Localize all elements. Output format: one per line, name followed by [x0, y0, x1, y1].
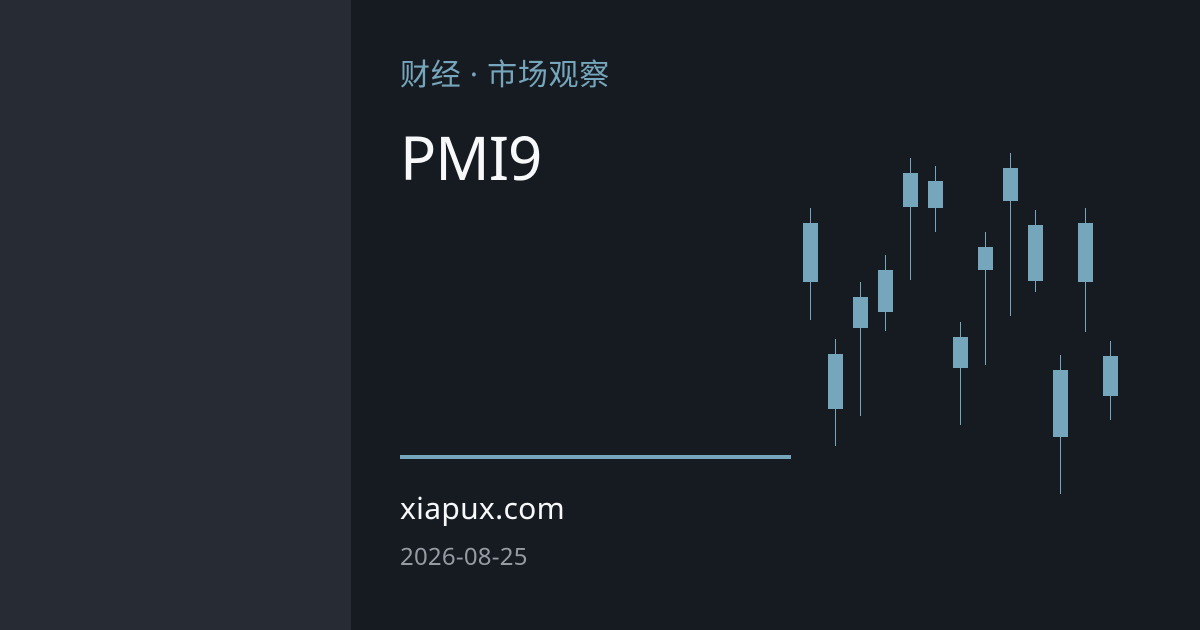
publication date: 2026-08-25 — [400, 540, 528, 573]
title: PMI9 — [400, 116, 541, 198]
panel: left sidebar — [0, 0, 351, 630]
accent rule — [400, 455, 791, 459]
site name: xiapux.com — [400, 487, 565, 528]
kicker: category heading: 财经 · 市场观察 — [400, 53, 610, 94]
